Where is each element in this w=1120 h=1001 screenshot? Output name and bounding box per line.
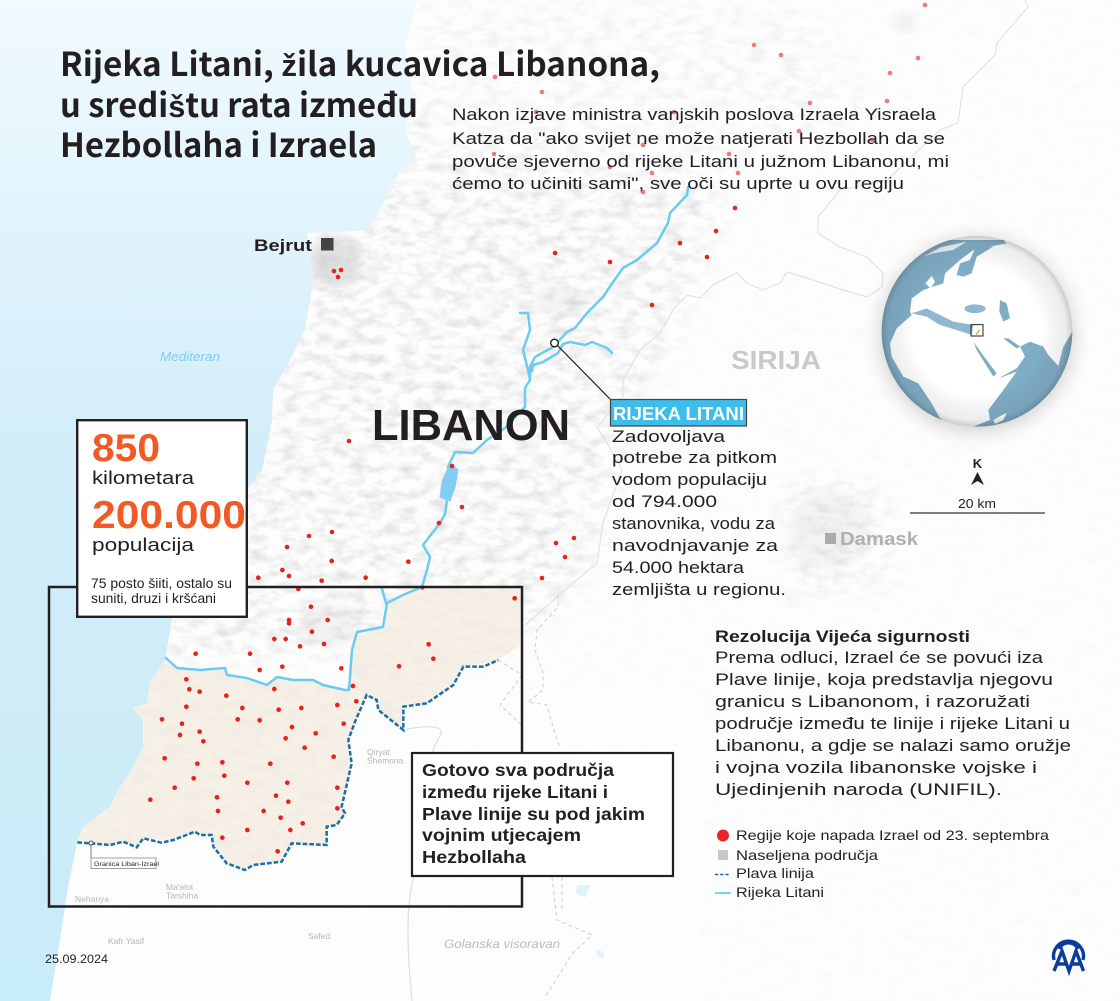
scale bar: 20 km: [958, 496, 996, 511]
stat note: [91, 576, 232, 606]
callout: Hezbollah influence: vojnim utjecajem: [422, 825, 581, 845]
place names: Qiryat: [367, 747, 390, 757]
description: zemljišta u regionu.: [612, 580, 786, 599]
scale bar: [910, 496, 1045, 513]
dots: Beirut and north: [285, 206, 737, 580]
text: Security Council resolution: Plave linije, koja predstavlja njegovu: [715, 670, 1053, 689]
description: od 794.000: [612, 492, 717, 511]
description: vodom populaciju: [612, 470, 767, 489]
place names: [75, 747, 560, 951]
river Litani: [166, 187, 688, 690]
legend: blue line: [715, 865, 814, 881]
dots: north of Litani: [193, 559, 425, 672]
globe locator: [860, 236, 1080, 440]
label: Mediteran: Mediteran: [160, 349, 220, 364]
callout: Hezbollah influence: Plave linije su pod jakim: [422, 804, 645, 824]
lake Qaraoun: [440, 463, 458, 501]
panel: Rijeka Litani: [610, 400, 786, 599]
text: Security Council resolution: Libanonu, a gdje se nalazi samo oružje: [715, 736, 1071, 755]
heading badge: RIJEKA LITANI: [613, 404, 744, 424]
zone: between Litani and Blue Line: [78, 588, 520, 869]
inset frame: [49, 587, 522, 906]
date: 25.09.2024: [45, 954, 109, 966]
label: SIRIJA: SIRIJA: [731, 345, 821, 375]
stat note: 75 posto šiiti, ostalo su: [91, 576, 232, 591]
label: Granica Liban-Izrael: [89, 841, 160, 868]
label: Bejrut with square: [254, 236, 334, 255]
dots: far north, faded: [492, 3, 927, 194]
intro text: ćemo to učiniti sami", sve oči su uprte u ovu regiju: [452, 174, 904, 193]
legend: blue line: Plava linija: [736, 865, 814, 881]
legend: river: Rijeka Litani: [736, 884, 824, 900]
description: potrebe za pitkom: [612, 448, 777, 467]
place names: Ma'alot: [166, 882, 194, 892]
inset: tan zone, river, blue line, red dots: [77, 558, 520, 872]
callout: Hezbollah influence: [412, 753, 673, 876]
text: Security Council resolution: Prema odluci, Izrael će se povući iza: [715, 648, 1044, 667]
text: Security Council resolution: granicu s Libanonom, i razoružati: [715, 692, 1030, 711]
title: Hezbollaha i Izraela: [60, 119, 377, 167]
legend: [715, 827, 1049, 900]
description: Zadovoljava: [612, 427, 726, 446]
dots: south of Litani: [148, 596, 517, 854]
description: 54.000 hektara: [612, 558, 745, 577]
description: navodnjavanje za: [612, 536, 779, 555]
intro text: povuče sjeverno od rijeke Litani u južnom Libanonu, mi: [452, 152, 949, 171]
title: u središtu rata između: [60, 79, 418, 127]
stat: 200.000 populacija: [92, 494, 246, 555]
text: Security Council resolution: [715, 627, 1071, 799]
description: [612, 427, 786, 599]
stat note: suniti, druzi i kršćani: [91, 591, 216, 606]
intro text: [452, 105, 949, 193]
north arrow: K: [973, 456, 983, 471]
stat: 850 kilometara: 850: [92, 427, 160, 470]
title: Rijeka Litani, žila kucavica Libanona,: [60, 38, 660, 86]
stat: 850 kilometara: kilometara: [92, 468, 195, 488]
text: Security Council resolution: i vojna vozila libanonske vojske i: [715, 758, 1037, 777]
north arrow: [971, 456, 984, 485]
intro text: Nakon izjave ministra vanjskih poslova Izraela Yisraela: [452, 105, 937, 124]
stat: 850 kilometara: [92, 427, 195, 488]
label: LIBANON: LIBANON: [372, 401, 570, 450]
place names: Nehanya: [75, 894, 109, 904]
label: Granica Liban-Izrael: Granica Liban-Izrael: [94, 861, 160, 868]
legend: attacked regions: Regije koje napada Izrael od 23. septembra: [736, 827, 1049, 843]
stat: 200.000 populacija: populacija: [92, 535, 195, 555]
text: Security Council resolution: Ujedinjenih naroda (UNIFIL).: [715, 780, 1002, 799]
callout: Hezbollah influence: Hezbollaha: [422, 847, 526, 867]
title: [60, 38, 660, 167]
place names: Golanska visoravan: [444, 937, 560, 951]
leader line from river to label: [551, 339, 610, 399]
place names: Kafr Yasif: [108, 936, 145, 946]
stat: 200.000 populacija: 200.000: [92, 494, 246, 537]
text: Security Council resolution: područje između te linije i rijeke Litani u: [715, 714, 1070, 733]
panel: stats: [77, 420, 247, 617]
locator square: [971, 325, 983, 336]
place names: Tarshiha: [166, 890, 198, 900]
icon: AA logo: [1054, 941, 1084, 971]
intro text: Katza da "ako svijet ne može natjerati Hezbollah da se: [452, 129, 945, 148]
text: Security Council resolution: Rezolucija Vijeća sigurnosti: [715, 627, 970, 646]
callout: Hezbollah influence: Gotovo sva područja: [422, 760, 614, 780]
place names: Shemona: [367, 756, 404, 766]
label: Bejrut with square: Bejrut: [254, 236, 312, 255]
label: Damask: Damask: [840, 529, 919, 549]
place names: Safed: [308, 931, 330, 941]
legend: populated areas: Naseljena područja: [736, 847, 878, 863]
description: stanovnika, vodu za: [612, 514, 776, 533]
blue line: [77, 660, 498, 870]
callout: Hezbollah influence: između rijeke Litani i: [422, 782, 608, 802]
legend: river: [715, 884, 824, 900]
